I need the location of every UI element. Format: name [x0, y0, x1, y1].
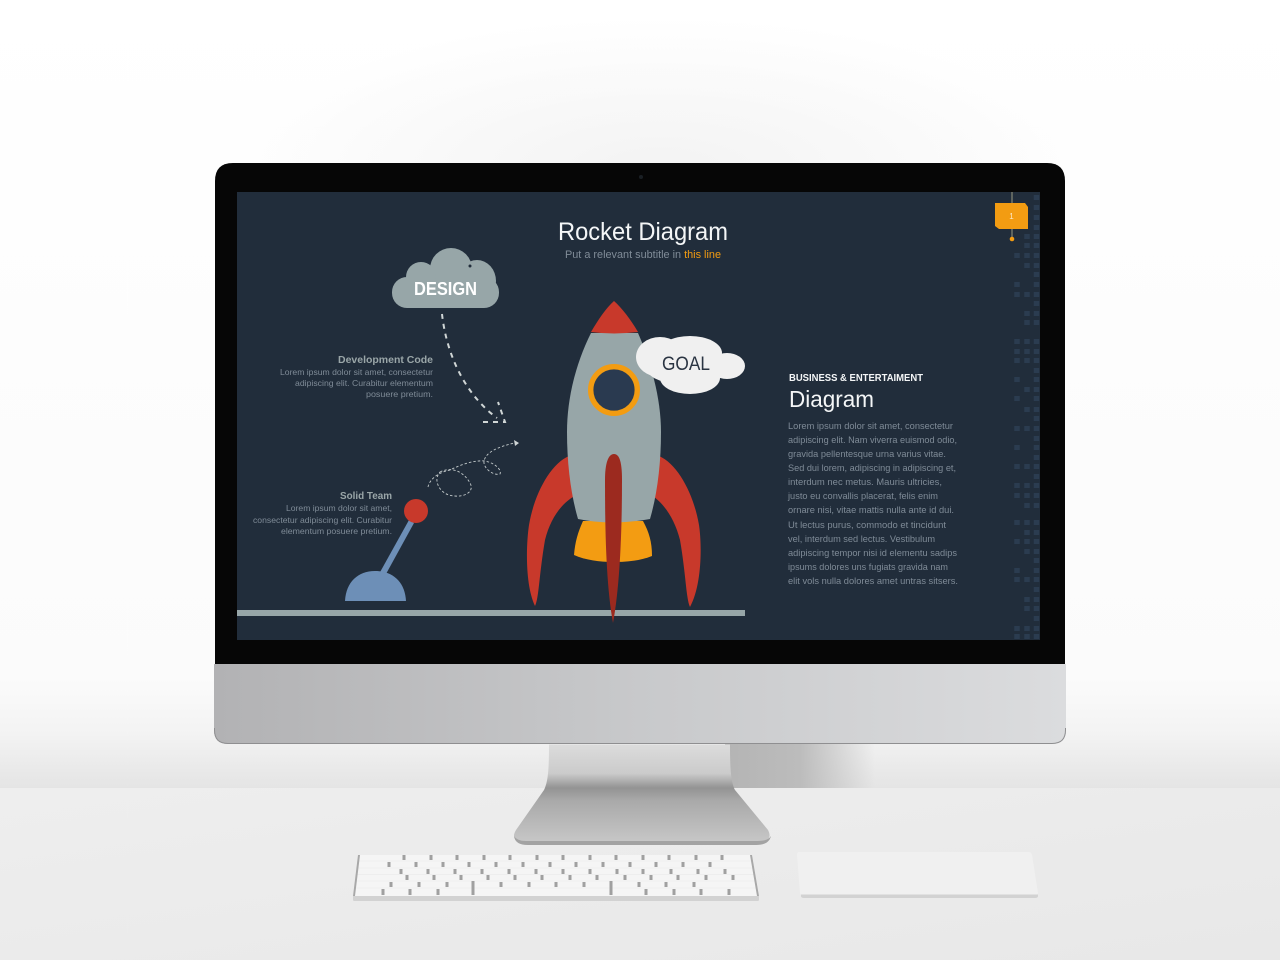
- section heading: Diagram: [789, 386, 874, 412]
- slide background: [237, 192, 1040, 640]
- arrow: dashed loop path: [428, 440, 519, 496]
- title: Rocket Diagram: [558, 218, 728, 246]
- body text: ornare nisi, vitae mattis nulla ante id dui.: [788, 505, 954, 516]
- body text: gravida pellentesque urna varius vitae.: [788, 449, 946, 460]
- body text: adipiscing tempor nisi id elementu sadips: [788, 548, 957, 559]
- rocket right fin: [654, 456, 701, 607]
- text block: solid team: Lorem ipsum dolor sit amet,: [286, 503, 392, 513]
- section eyebrow: BUSINESS & ENTERTAIMENT: [789, 373, 923, 384]
- monitor: [214, 163, 1066, 744]
- body text: [787, 421, 958, 587]
- body text: vel, interdum sed lectus. Vestibulum: [788, 534, 935, 545]
- text block: solid team: Solid Team: [340, 490, 392, 502]
- text block: development code: Development Code: [338, 354, 433, 366]
- body text: interdum nec metus. Mauris ultricies,: [788, 477, 942, 488]
- subtitle: Put a relevant subtitle in this line: [565, 249, 721, 261]
- arrow: dashed design to rocket: [442, 314, 505, 422]
- text block: development code: Lorem ipsum dolor sit amet, consectetur: [280, 367, 433, 377]
- rocket left fin: [527, 456, 573, 606]
- body text: ipsums dolores uns fugiats gravida nam: [788, 562, 948, 573]
- monitor stand: [514, 744, 771, 845]
- cloud: design: DESIGN: [414, 278, 477, 299]
- trackpad: [797, 852, 1038, 898]
- page number tag: [995, 192, 1028, 241]
- text block: solid team: consectetur adipiscing elit. Curabitur: [253, 515, 392, 525]
- body text: elit vols nulla dolores amet untras sitsers.: [788, 576, 958, 587]
- rocket center fin: [605, 454, 622, 623]
- rocket illustration: [527, 301, 701, 623]
- rocket body: [567, 333, 661, 522]
- keyboard: [353, 855, 759, 901]
- rocket nose: [591, 301, 638, 334]
- ground line: [237, 610, 745, 616]
- body text: Ut lectus purus, commodo et tincidunt: [788, 520, 946, 531]
- text block: solid team: elementum posuere pretium.: [281, 526, 392, 536]
- body text: adipiscing elit. Nam viverra euismod odio,: [788, 435, 957, 446]
- rocket window: [591, 367, 637, 413]
- rocket flame: [574, 521, 652, 562]
- body text: Lorem ipsum dolor sit amet, consectetur: [788, 421, 953, 432]
- body text: Sed dui lorem, adipiscing in adipiscing et,: [788, 463, 956, 474]
- cloud: design: [392, 248, 499, 308]
- text block: solid team: [253, 490, 392, 536]
- text block: development code: adipiscing elit. Curabitur elementum: [295, 378, 433, 388]
- decorative dot pattern: [1017, 195, 1036, 639]
- text block: development code: posuere pretium.: [366, 389, 433, 399]
- body text: justo eu convallis placerat, felis enim: [787, 491, 938, 502]
- cloud: goal: [636, 336, 745, 394]
- page number tag: 1: [1009, 212, 1014, 221]
- text block: development code: [280, 354, 433, 399]
- cloud: goal: GOAL: [662, 354, 710, 375]
- icon: lever: [345, 499, 428, 601]
